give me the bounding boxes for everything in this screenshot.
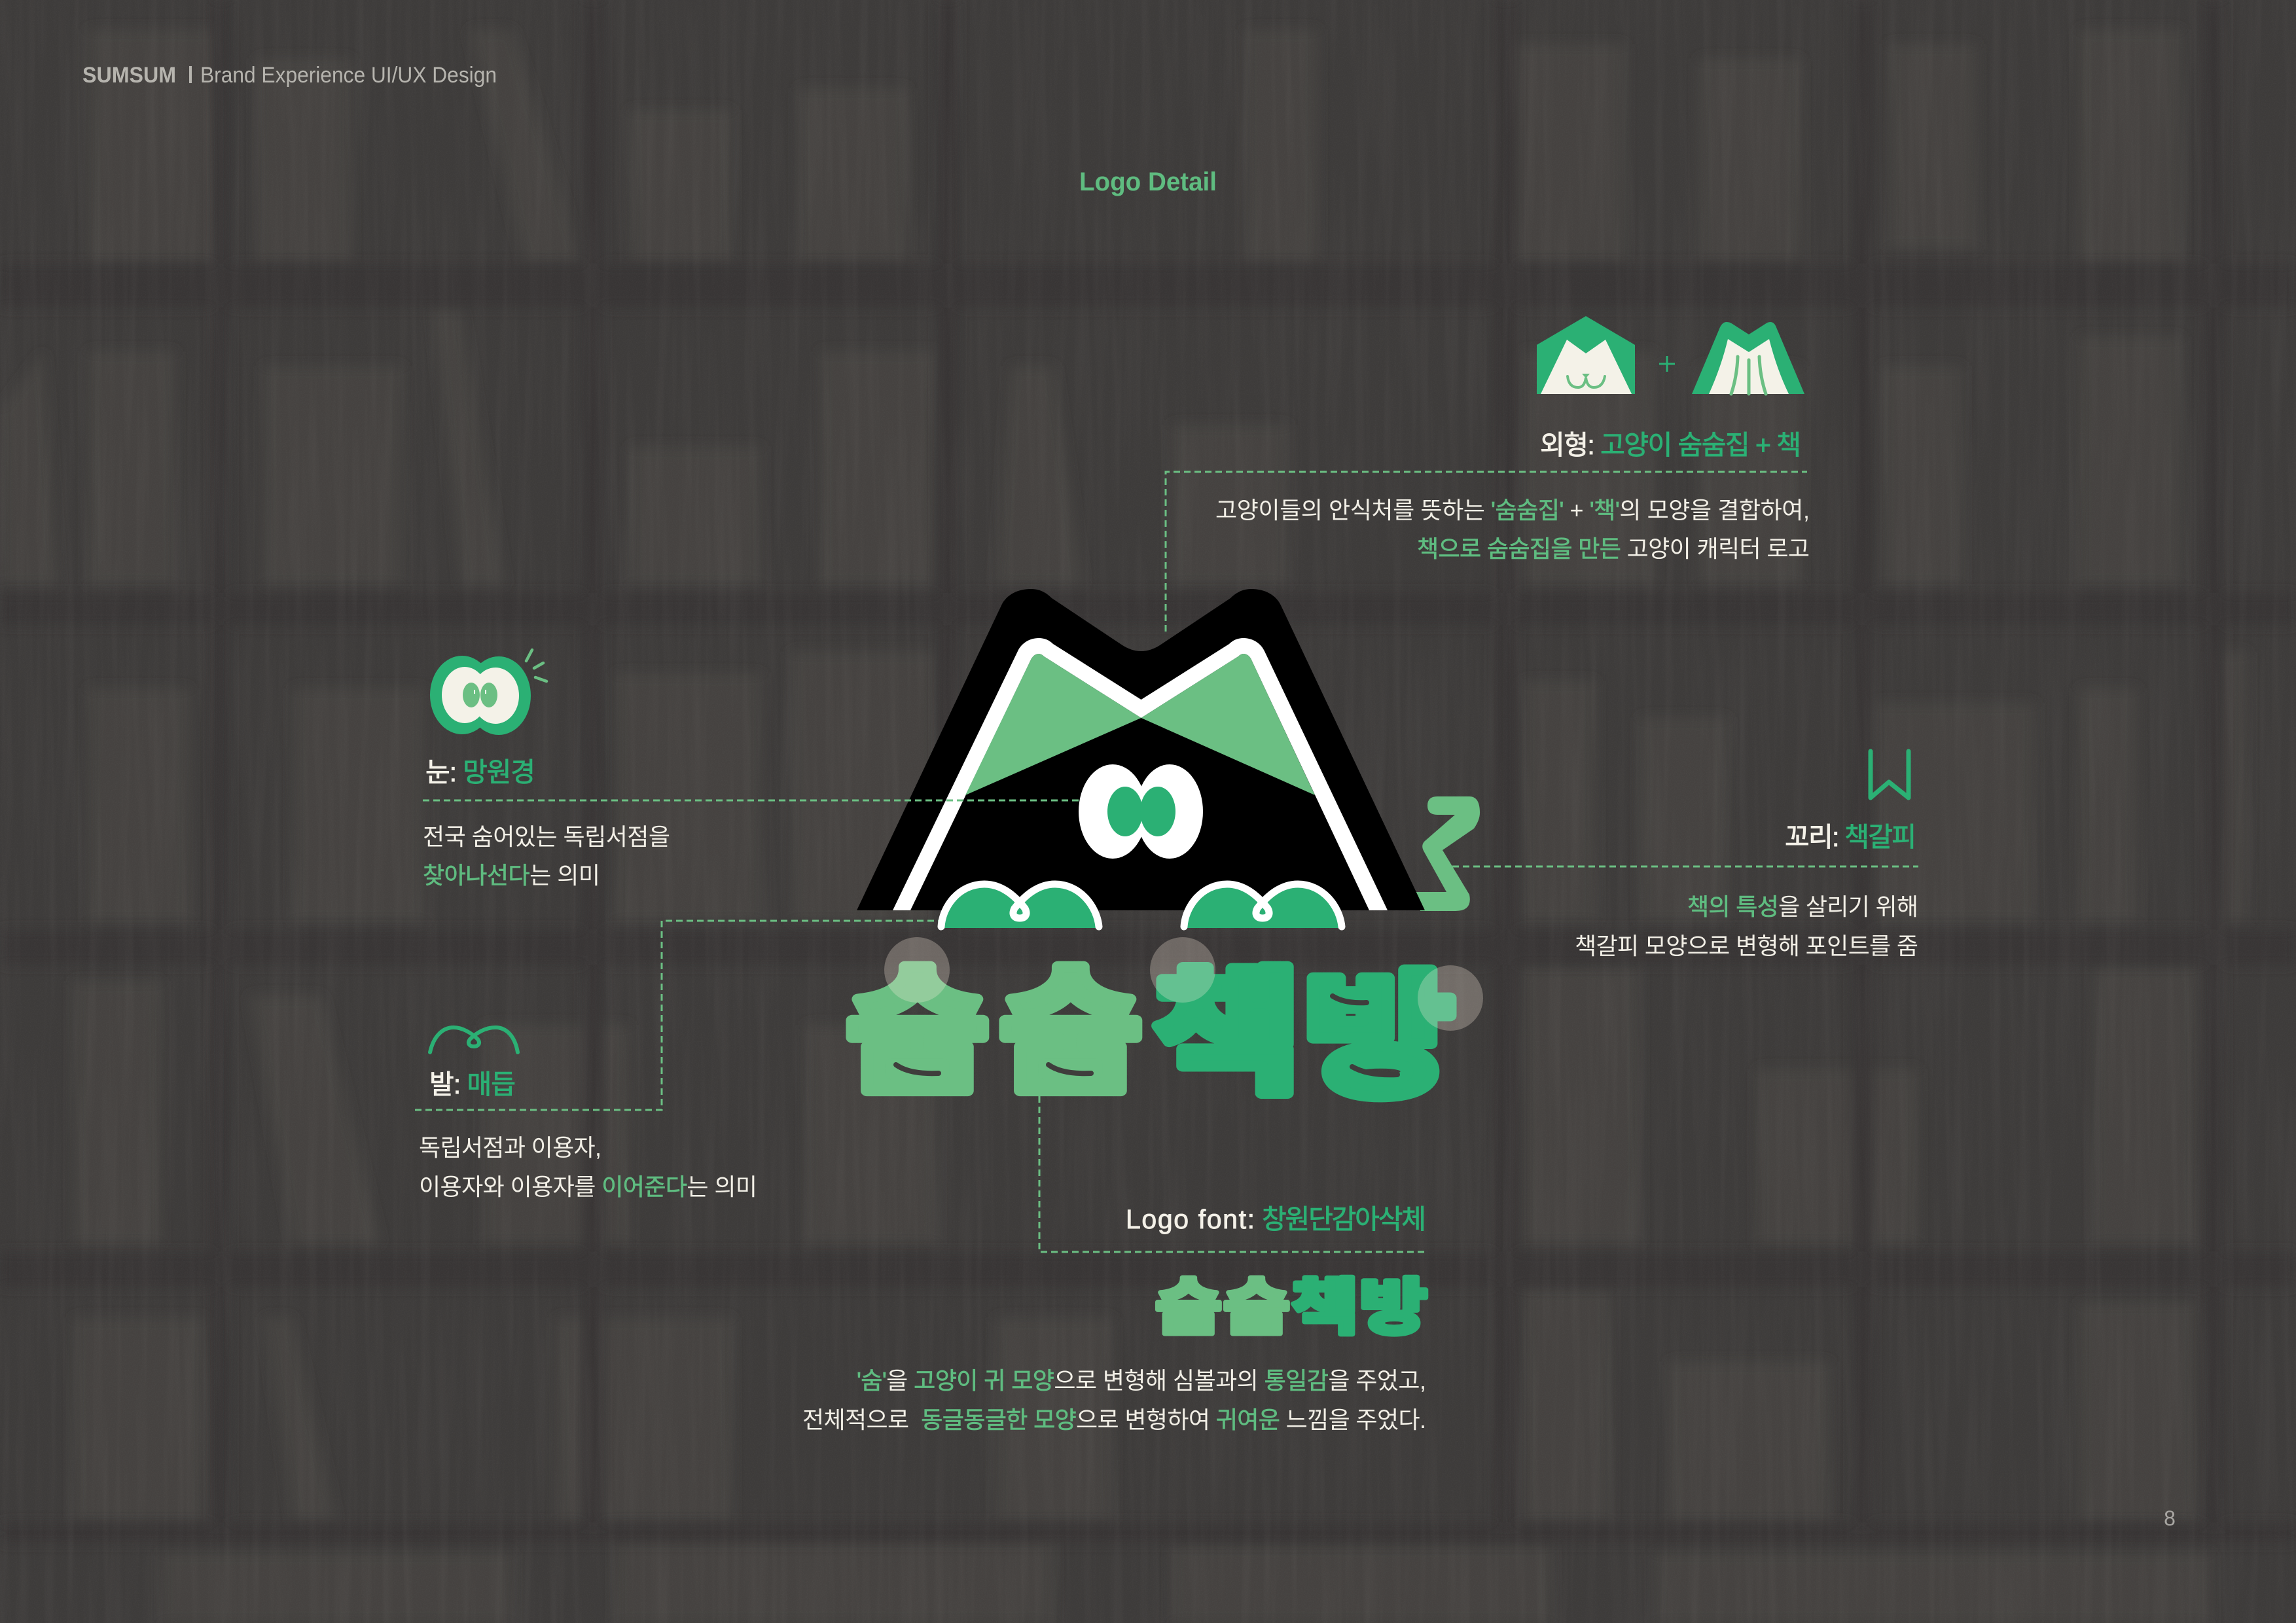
- icon: cat house: [1537, 316, 1635, 394]
- tail bookmark: [1415, 796, 1480, 911]
- wordmark: 숨숨책방 small: 숨: [1223, 1274, 1290, 1342]
- text block: 외형 description: 책으로 숨숨집을 만든 고양이 캐릭터 로고: [1417, 535, 1810, 562]
- header: brand label: Brand Experience UI/UX Design: [200, 63, 497, 88]
- eye leader line: [423, 800, 1080, 801]
- white outline: [893, 638, 1388, 910]
- heading: 눈: 눈: 망원경: [425, 757, 535, 787]
- text block: 눈 description: 전국 숨어있는 독립서점을: [423, 823, 670, 850]
- right paw: [1184, 884, 1342, 928]
- wordmark details: smile marks: [896, 996, 1397, 1075]
- text block: 눈 description: [423, 823, 670, 889]
- text block: logo font description: 전체적으로 동글동글한 모양으로 변형하여 귀여운 느낌을 주었다.: [802, 1406, 1426, 1433]
- text block: 외형 description: [1215, 497, 1810, 562]
- text block: 눈 description: 찾아나선다는 의미: [423, 862, 600, 889]
- cat eyes: [1079, 764, 1203, 859]
- text block: 발 description: 독립서점과 이용자,: [419, 1134, 601, 1161]
- dashed leader lines: [413, 472, 1918, 1252]
- wordmark: 숨숨책방 small: 숨: [1155, 1274, 1222, 1342]
- wordmark: 숨숨책방 large: 방: [1304, 962, 1454, 1113]
- heading: Logo font: 창원단감아삭체: [1262, 1204, 1426, 1234]
- icon: eye telescope: [430, 650, 547, 735]
- header: brand label: [82, 63, 497, 88]
- text block: logo font description: '숨'을 고양이 귀 모양으로 변형해 심볼과의 통일감을 주었고,: [857, 1367, 1426, 1394]
- title: Logo Detail: Logo Detail: [1079, 168, 1217, 196]
- left paw: [941, 884, 1099, 928]
- wordmark: 숨숨책방 small: [1155, 1274, 1427, 1342]
- wordmark: 숨숨책방 small: 책: [1291, 1274, 1358, 1342]
- green ears: [965, 654, 1315, 795]
- heading: 발: 발: 매듭: [429, 1069, 516, 1099]
- heading: 꼬리: 꼬리: 책갈피: [1785, 822, 1916, 852]
- wordmark: 숨숨책방 large: [847, 957, 1454, 1113]
- heading: 외형: 외형: 고양이 숨숨집 + 책: [1540, 430, 1801, 460]
- text block: 외형 description: 고양이들의 안식처를 뜻하는 '숨숨집' + '책'의 모양을 결합하여,: [1215, 497, 1810, 524]
- wordmark: 숨숨책방 large: 숨: [847, 957, 988, 1108]
- icon: book: [1692, 322, 1804, 394]
- icon: plus sign: [1659, 356, 1675, 372]
- heading: Logo font: [1126, 1204, 1426, 1234]
- icon: knot paw: [430, 1027, 518, 1052]
- page number: 8: [2164, 1507, 2176, 1530]
- main symbol: cat in book house: [857, 589, 1480, 928]
- text block: logo font description: [802, 1367, 1426, 1433]
- black silhouette: [857, 589, 1425, 910]
- text block: 꼬리 description: [1575, 893, 1918, 959]
- text block: 발 description: 이용자와 이용자를 이어준다는 의미: [419, 1173, 757, 1200]
- wordmark: 숨숨책방 small: 방: [1359, 1274, 1427, 1342]
- wordmark: 숨숨책방 large: 숨: [1000, 957, 1141, 1108]
- icon: bookmark: [1871, 751, 1909, 798]
- wordmark: 숨숨책방 large: 책: [1153, 958, 1300, 1109]
- wordmark highlights: ear circles: [884, 937, 1483, 1031]
- header: brand label: SUMSUM: [82, 63, 176, 88]
- text block: 발 description: [419, 1134, 757, 1200]
- text block: 꼬리 description: 책의 특성을 살리기 위해: [1687, 893, 1918, 920]
- text block: 꼬리 description: 책갈피 모양으로 변형해 포인트를 줌: [1575, 933, 1918, 959]
- heading: Logo font: Logo font:: [1126, 1204, 1255, 1234]
